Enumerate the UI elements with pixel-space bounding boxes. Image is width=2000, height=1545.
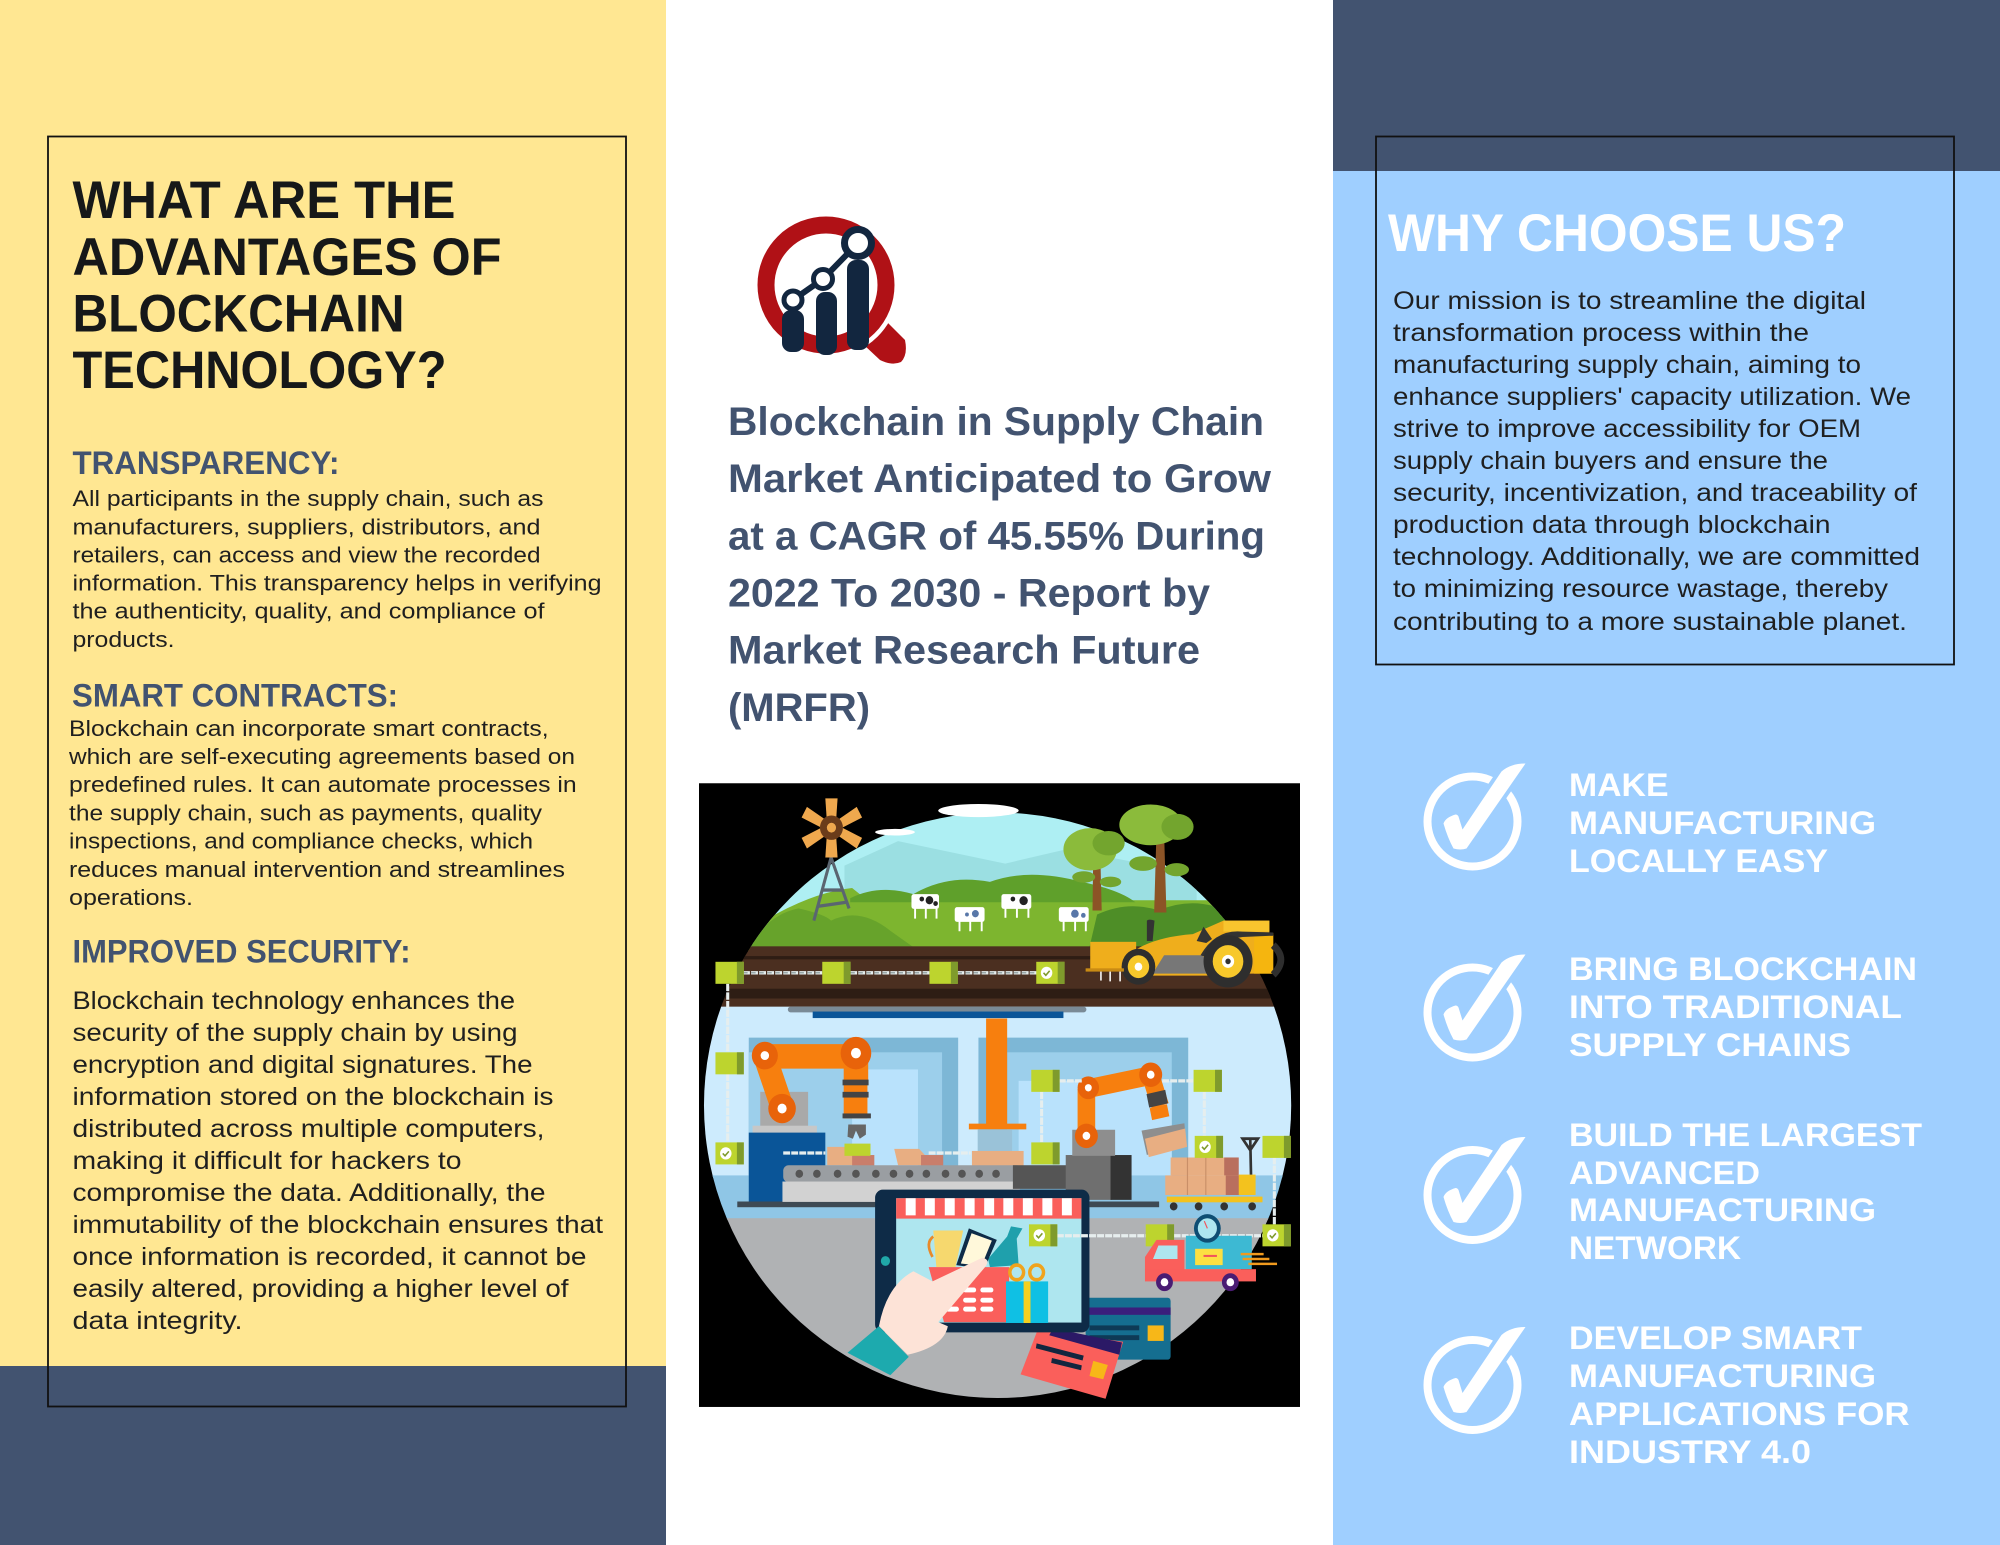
text block: mission statement: production data through blockchain	[1393, 511, 1830, 539]
list item: develop smart manufacturing applications: DEVELOP SMART	[1569, 1320, 1862, 1356]
text block: mission statement: transformation process within the	[1393, 319, 1809, 347]
icon: check 2	[1428, 954, 1526, 1058]
image background	[699, 783, 1300, 1407]
list item: make manufacturing locally easy: LOCALLY EASY	[1569, 843, 1828, 879]
list item: build the largest network: NETWORK	[1569, 1230, 1741, 1266]
list item: build the largest network: ADVANCED	[1569, 1155, 1760, 1191]
text block: smart contracts: Blockchain can incorporate smart contracts,	[69, 716, 549, 741]
title: market report headline: Market Research Future	[728, 628, 1200, 672]
text block: improved security: information stored on the blockchain is	[72, 1083, 554, 1111]
text block: transparency	[72, 486, 602, 652]
list item: build the largest network: MANUFACTURING	[1569, 1192, 1876, 1228]
heading: why choose us: WHY CHOOSE US?	[1388, 204, 1846, 263]
list item: make manufacturing locally easy: MANUFACTURING	[1569, 805, 1876, 841]
text block: mission statement: supply chain buyers and ensure the	[1393, 447, 1828, 475]
subheading: improved security: IMPROVED SECURITY:	[72, 934, 410, 970]
text block: smart contracts: reduces manual intervention and streamlines	[69, 857, 565, 882]
title: market report headline: (MRFR)	[728, 686, 870, 730]
text block: transparency: information. This transparency helps in verifying	[72, 570, 602, 596]
clouds	[875, 804, 1019, 835]
icon: MRFR magnifier logo	[765, 224, 906, 364]
title: market report headline	[728, 400, 1272, 730]
list item: bring blockchain into traditional supply chains: SUPPLY CHAINS	[1569, 1027, 1851, 1063]
subheading: transparency: TRANSPARENCY:	[72, 445, 340, 481]
heading: advantages of blockchain	[72, 171, 502, 400]
text block: improved security: making it difficult for hackers to	[72, 1147, 462, 1175]
text block: smart contracts: the supply chain, such as payments, quality	[69, 800, 543, 825]
left outlined frame	[48, 136, 626, 1406]
list item: build the largest network	[1569, 1117, 1922, 1266]
heading: advantages of blockchain: BLOCKCHAIN	[72, 284, 404, 344]
orange robot arm left	[752, 1037, 871, 1139]
list item: develop smart manufacturing applications: MANUFACTURING	[1569, 1358, 1876, 1394]
list item: make manufacturing locally easy: MAKE	[1569, 767, 1668, 803]
heading: advantages of blockchain: WHAT ARE THE	[72, 171, 456, 230]
pallet truck with boxes	[1165, 1139, 1262, 1210]
hand	[848, 1258, 987, 1375]
list item: bring blockchain into traditional supply chains: BRING BLOCKCHAIN	[1569, 951, 1917, 987]
windmill	[802, 798, 862, 921]
list item: develop smart manufacturing applications: INDUSTRY 4.0	[1569, 1434, 1811, 1470]
text block: transparency: products.	[72, 627, 174, 652]
illustration: farm to factory to retail supply chain	[699, 783, 1300, 1407]
text block: transparency: retailers, can access and view the recorded	[72, 542, 540, 568]
text block: transparency: manufacturers, suppliers, distributors, and	[72, 514, 540, 539]
text block: smart contracts: predefined rules. It can automate processes in	[69, 772, 577, 797]
text block: improved security: data integrity.	[72, 1307, 242, 1335]
soil ledge	[788, 1007, 1086, 1018]
text block: improved security: compromise the data. Additionally, the	[72, 1179, 546, 1207]
blockchain top row	[715, 962, 1065, 984]
text block: smart contracts: inspections, and compliance checks, which	[69, 829, 533, 854]
text block: mission statement: contributing to a more sustainable planet.	[1393, 608, 1907, 636]
title: market report headline: 2022 To 2030 - Report by	[728, 572, 1211, 616]
list item: bring blockchain into traditional supply chains	[1569, 951, 1917, 1063]
text block: improved security: immutability of the blockchain ensures that	[72, 1211, 603, 1239]
conveyor with boxes	[782, 1130, 1132, 1202]
central press	[969, 1018, 1026, 1154]
list item: develop smart manufacturing applications: APPLICATIONS FOR	[1569, 1396, 1910, 1432]
tablet chain and truck	[1029, 1214, 1291, 1291]
text block: improved security: distributed across multiple computers,	[72, 1115, 544, 1143]
trees	[1063, 804, 1194, 912]
text block: mission statement: technology. Additionally, we are committed	[1393, 543, 1920, 571]
text block: improved security: encryption and digital signatures. The	[72, 1051, 532, 1079]
list item: build the largest network: BUILD THE LARGEST	[1569, 1117, 1922, 1153]
right outlined frame	[1376, 136, 1954, 664]
text block: improved security	[72, 987, 603, 1335]
list item: develop smart manufacturing applications	[1569, 1320, 1910, 1470]
text block: mission statement: Our mission is to streamline the digital	[1393, 287, 1866, 315]
list item: make manufacturing locally easy	[1569, 767, 1876, 879]
text block: improved security: easily altered, providing a higher level of	[72, 1275, 569, 1303]
factory chains and blocks	[715, 984, 1291, 1224]
text block: smart contracts: operations.	[69, 885, 193, 910]
text block: transparency: All participants in the supply chain, such as	[72, 486, 544, 511]
text block: mission statement: enhance suppliers' capacity utilization. We	[1393, 383, 1911, 411]
subheading: smart contracts: SMART CONTRACTS:	[72, 678, 398, 714]
list item: bring blockchain into traditional supply chains: INTO TRADITIONAL	[1569, 989, 1902, 1025]
text block: smart contracts	[68, 716, 577, 910]
orange robot arm right	[1075, 1062, 1187, 1157]
text block: mission statement: strive to improve accessibility for OEM	[1393, 415, 1861, 443]
cows	[911, 894, 1089, 931]
icon: check 4	[1428, 1327, 1526, 1430]
text block: improved security: security of the supply chain by using	[72, 1019, 518, 1047]
left robot base and back walls	[737, 1038, 1188, 1207]
tractor	[1086, 920, 1283, 990]
panel: right blue column	[1333, 0, 2000, 1545]
text block: mission statement: to minimizing resource wastage, thereby	[1393, 575, 1889, 603]
icon: check 3	[1428, 1137, 1526, 1240]
text block: mission statement	[1393, 287, 1920, 636]
text block: improved security: Blockchain technology enhances the	[72, 987, 515, 1015]
scene circle	[699, 809, 1300, 1422]
credit cards	[1021, 1298, 1171, 1399]
text block: smart contracts: which are self-executing agreements based on	[68, 744, 575, 769]
heading: advantages of blockchain: TECHNOLOGY?	[72, 341, 446, 400]
panel: left yellow column	[0, 0, 666, 1545]
title: market report headline: Market Anticipated to Grow	[728, 457, 1272, 501]
text block: mission statement: manufacturing supply chain, aiming to	[1393, 351, 1861, 379]
heading: advantages of blockchain: ADVANTAGES OF	[72, 228, 502, 287]
tablet storefront	[875, 1190, 1089, 1332]
title: market report headline: Blockchain in Supply Chain	[728, 400, 1264, 444]
title: market report headline: at a CAGR of 45.55% During	[728, 514, 1265, 558]
text block: mission statement: security, incentivization, and traceability of	[1393, 479, 1917, 507]
icon: check 1	[1428, 764, 1526, 866]
text block: improved security: once information is recorded, it cannot be	[72, 1243, 586, 1271]
text block: transparency: the authenticity, quality, and compliance of	[72, 599, 545, 624]
